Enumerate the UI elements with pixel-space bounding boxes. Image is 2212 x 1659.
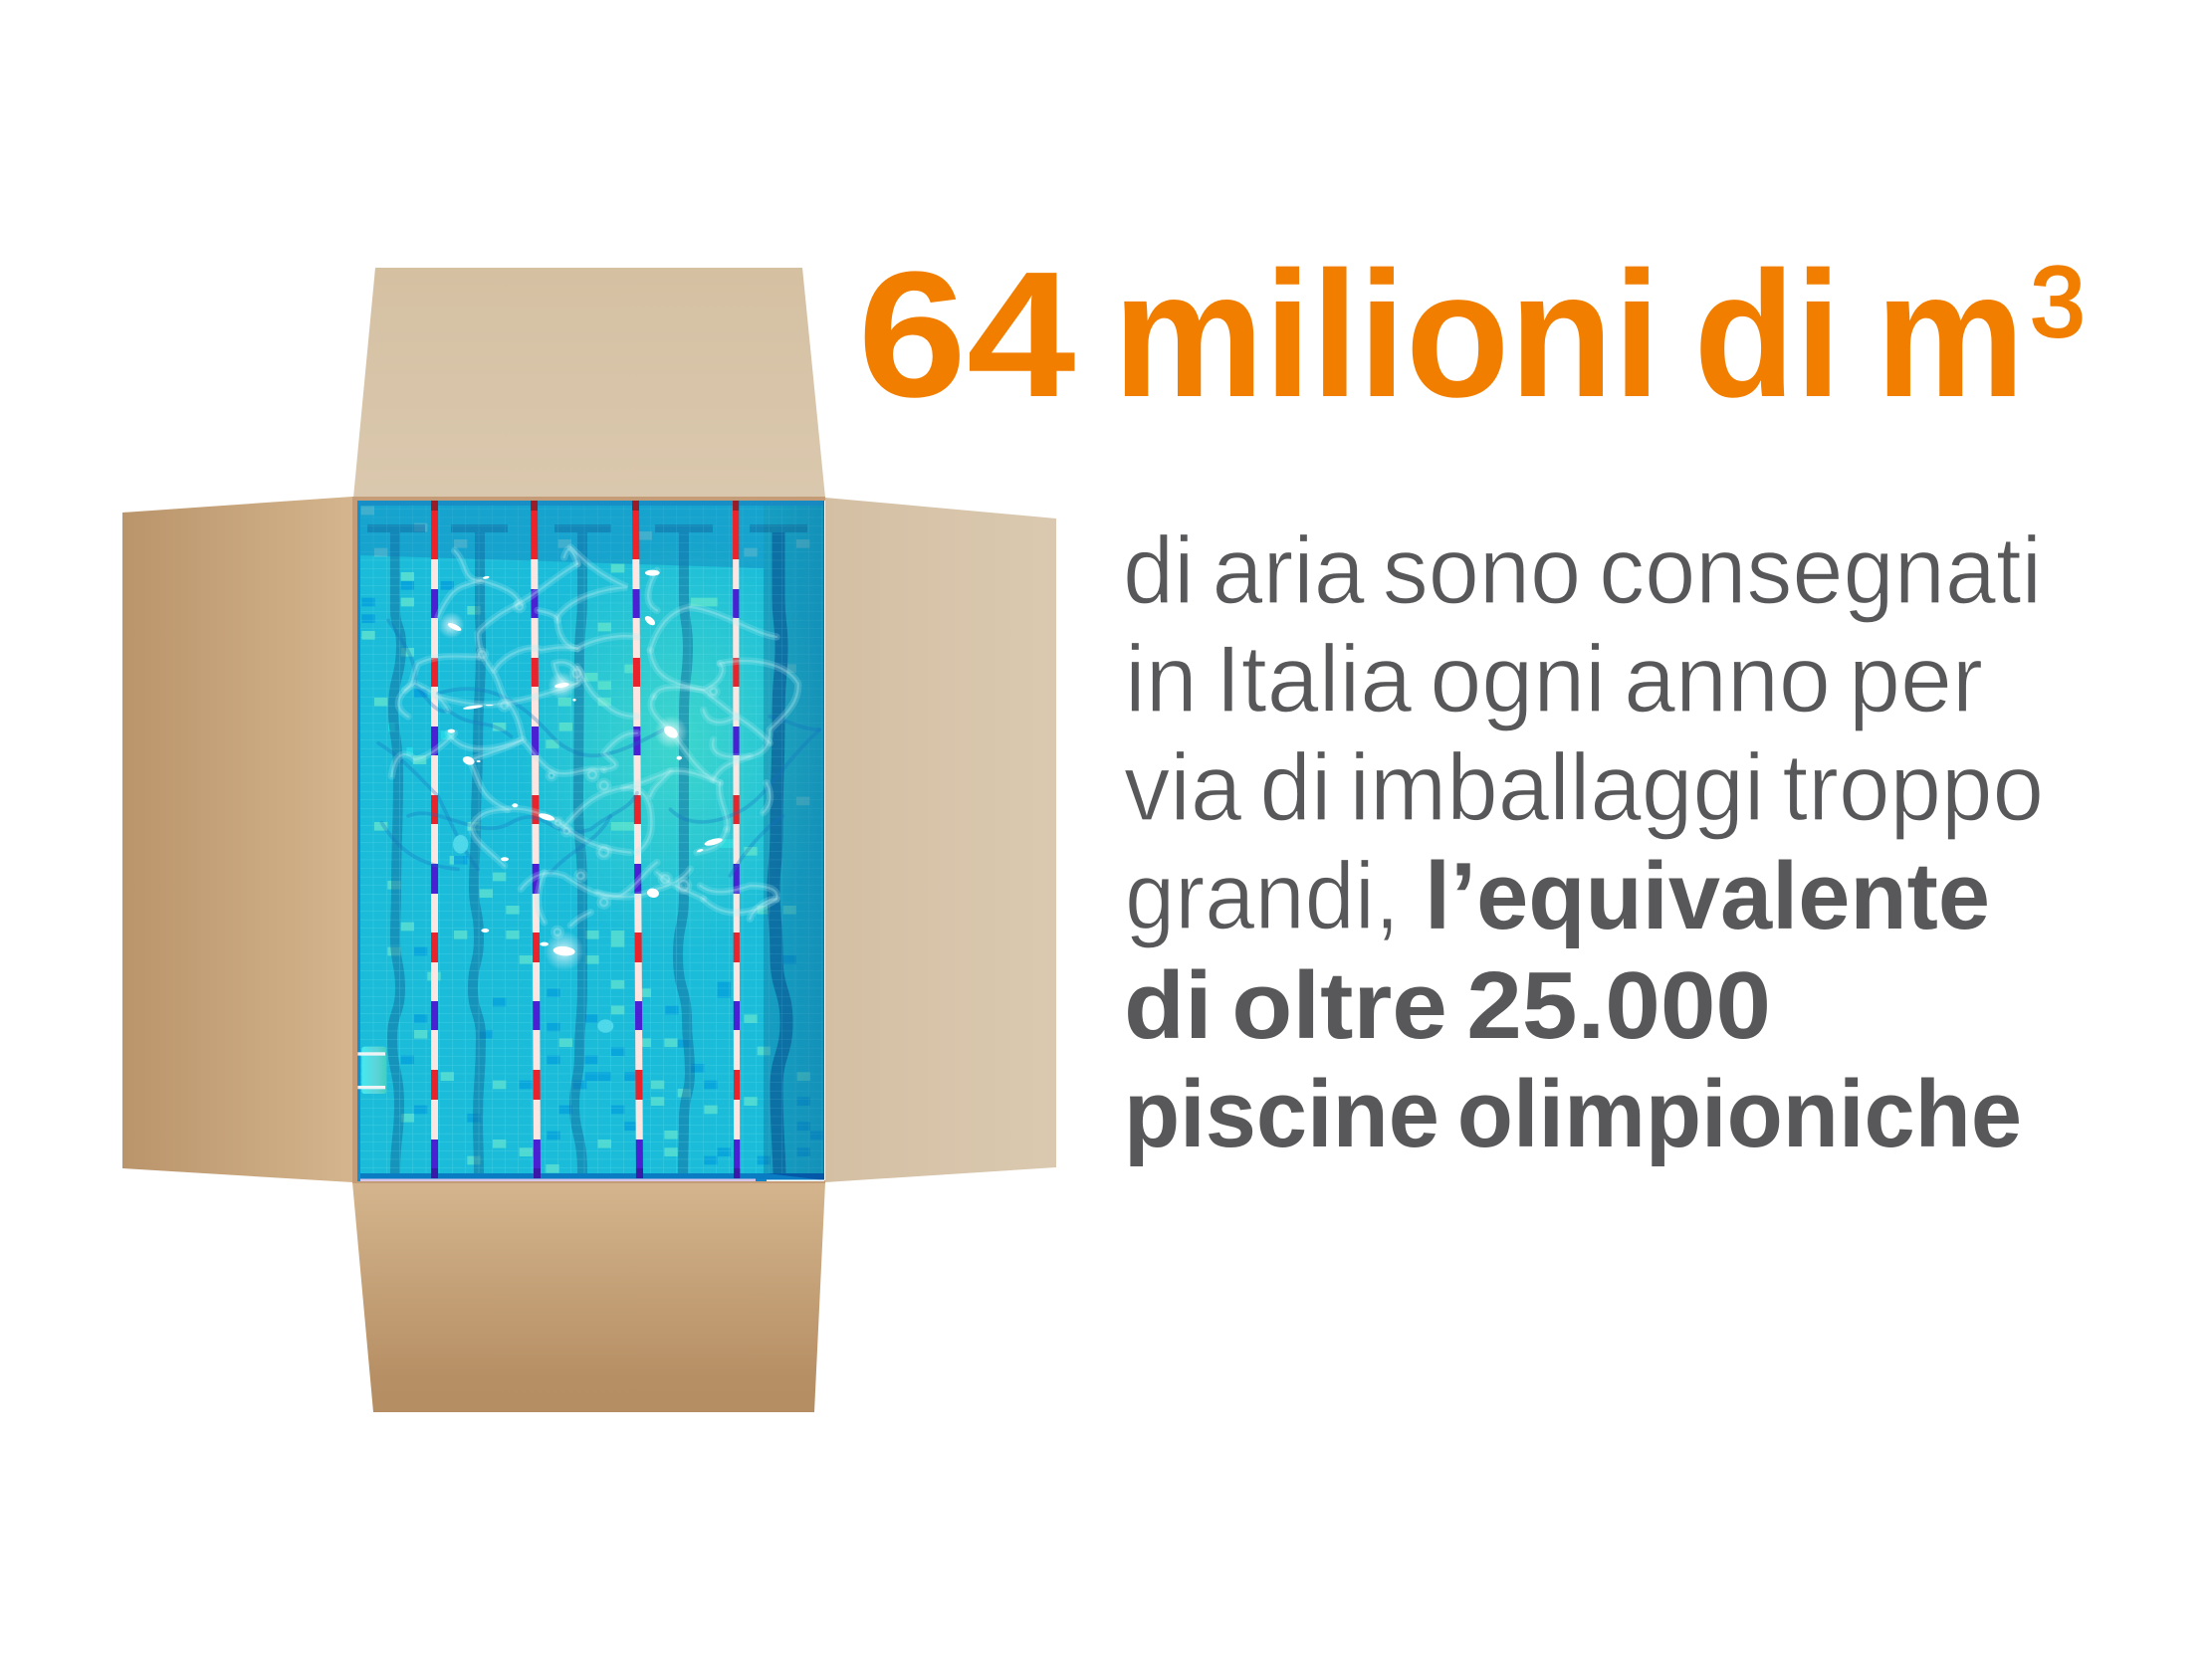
pool ladder <box>357 1047 386 1094</box>
text block: description: di aria sono consegnati <box>1123 518 2042 624</box>
grid of tile joints <box>360 505 823 1173</box>
box flap: bottom <box>352 1182 825 1412</box>
left wall edge <box>357 501 360 1181</box>
water caustics: dark web <box>378 620 819 876</box>
water caustics: soft light web <box>391 547 798 935</box>
shadow on deep end <box>764 501 824 1173</box>
water highlights lower <box>481 888 660 1033</box>
box flap: top <box>353 268 825 498</box>
title: di <box>1694 235 1842 435</box>
mosaic tiles lower <box>387 873 823 1173</box>
box flap: left <box>122 497 352 1182</box>
bottom pool edge <box>357 1173 824 1179</box>
text block: description: piscine olimpioniche <box>1124 1061 2022 1167</box>
text block: description: di oltre 25.000 <box>1124 952 1771 1059</box>
lane lines on pool floor <box>367 528 807 1173</box>
water highlights upper <box>438 570 723 861</box>
shadow on shallow top end <box>360 501 764 568</box>
text block: description <box>1123 518 2044 1167</box>
water caustics: bright web <box>391 547 798 935</box>
text block: description: grandi, <box>1125 843 1400 949</box>
panel: open cardboard box with swimming pool <box>122 268 1056 1412</box>
box flap: right <box>825 498 1056 1182</box>
title: m <box>1876 235 2025 435</box>
title: milioni <box>1113 235 1660 435</box>
title: ³ <box>2031 231 2085 420</box>
text block: description: l’equivalente <box>1425 843 1990 949</box>
pool <box>352 501 836 1182</box>
text block: description: via di imballaggi troppo <box>1124 734 2044 841</box>
mosaic tiles upper <box>361 507 809 865</box>
text block: description: in Italia ogni anno per <box>1125 626 1983 732</box>
title <box>858 231 2085 435</box>
title: 64 <box>858 235 1075 435</box>
box inner edge <box>352 497 825 1183</box>
lane ropes <box>431 501 740 1178</box>
teal light area <box>555 581 773 902</box>
